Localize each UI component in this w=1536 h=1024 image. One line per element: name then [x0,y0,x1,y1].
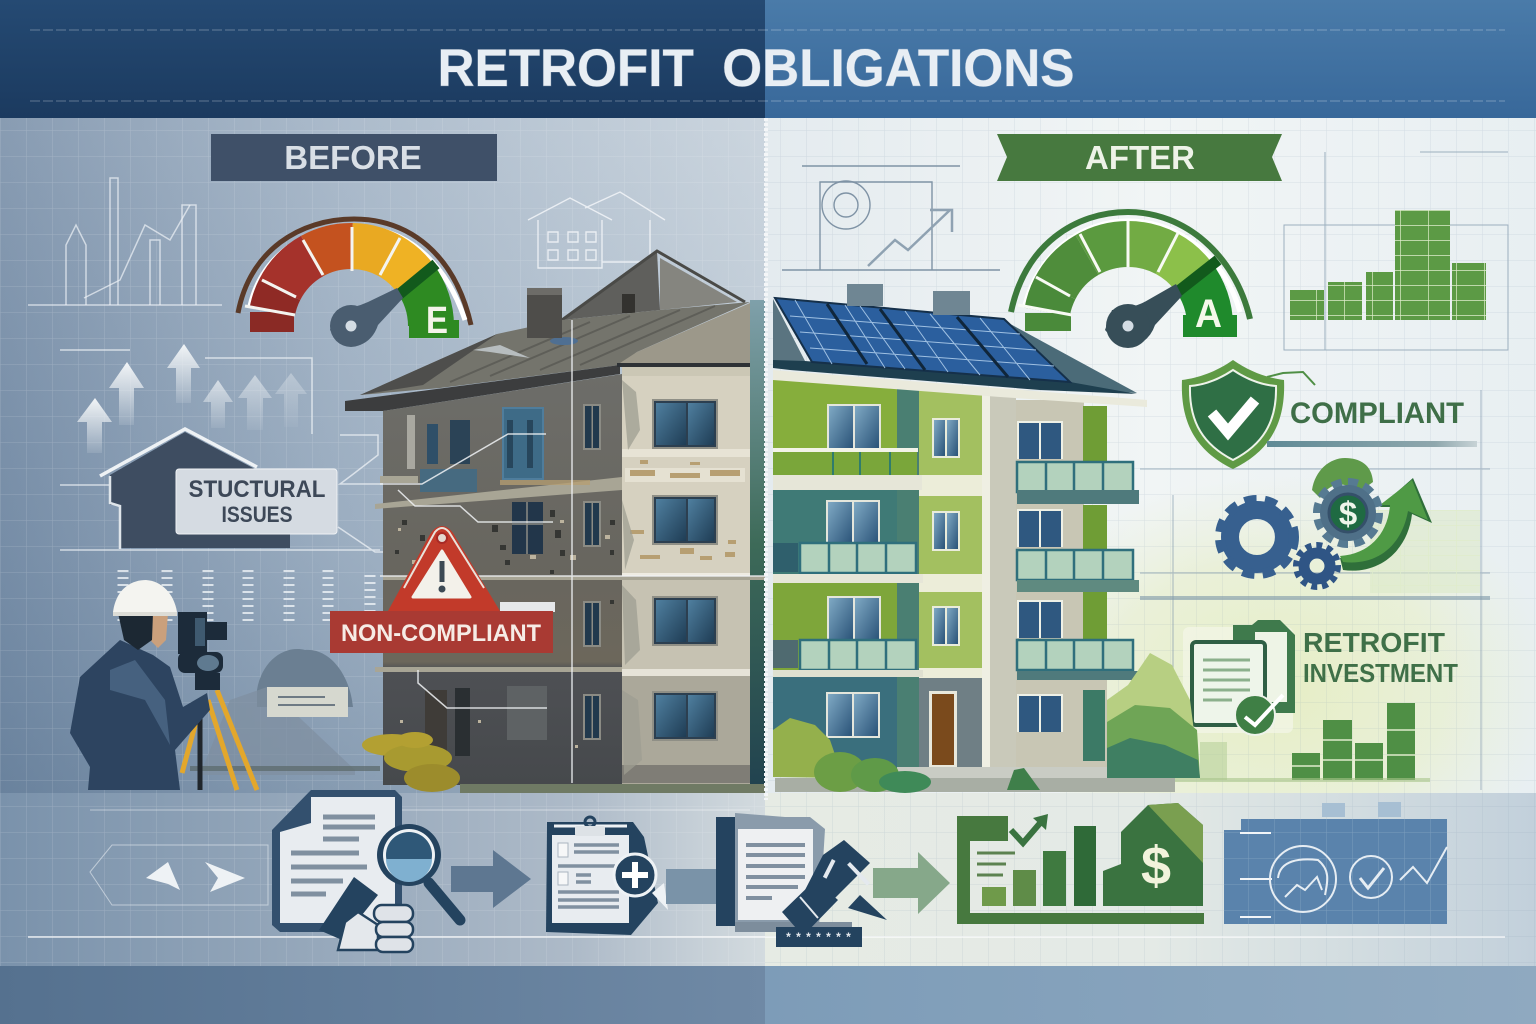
icon: up arrows [77,344,307,453]
blueprint lines right column [1140,390,1490,790]
new walls [773,380,1107,777]
arrow 1 [451,850,531,908]
grass line [1130,778,1430,782]
title: RETROFIT OBLIGATIONS [438,39,1074,98]
surveyor figure [70,580,257,790]
lower strip background [0,793,1536,967]
old windows [407,399,718,756]
before label [211,134,497,181]
icon: document with magnifier and coins [272,790,460,952]
label: retrofit investment: INVESTMENT [1303,658,1458,688]
rating letter: A [1195,292,1222,336]
camera [178,612,227,690]
footer band [0,966,1536,1024]
callout: structural issues: STUCTURAL [188,476,326,503]
solar roof [773,298,1147,407]
new windows [826,404,1063,738]
icon: house [100,429,290,549]
icon: clipboard with plus [546,817,668,935]
shrubs: new side [773,653,1200,793]
callout: structural issues: ISSUES [222,502,292,527]
blueprint sketch: line chart top left [28,178,222,305]
arrow 3 [873,852,950,914]
panel: finance chart: $ [1141,836,1171,896]
energy gauge: E [238,219,471,347]
horizontal rule under gears [1140,596,1490,600]
icon: gears, dollar and arrow [1220,458,1432,587]
body [70,640,210,790]
entrance steps [897,767,1113,792]
blueprint sketch: map and rising trend [782,166,1000,270]
icon: compliance shield [1182,360,1315,469]
old walls [383,300,765,790]
gauge needle [1105,284,1182,348]
tick marks [123,570,370,622]
after label [997,134,1282,181]
panel: performance dashboard [1224,802,1447,924]
label: compliant: COMPLIANT [1290,397,1464,430]
pale grid bars behind arrow [1370,510,1480,593]
banner: non-compliant: NON-COMPLIANT [341,620,541,647]
blueprint bracket lines [60,350,400,552]
callout: structural issues [176,469,337,534]
balconies [773,448,1139,680]
entrance door [929,691,957,767]
arrow 2 band [666,869,717,904]
label: retrofit investment: RETROFIT [1303,627,1445,658]
new building [773,284,1147,792]
divider line [764,118,768,800]
plaster damage [395,380,745,775]
survey scene background [190,649,380,775]
shrubs: old side [362,732,460,792]
chimneys [847,284,970,315]
bar chart: green top right [1284,152,1508,350]
blueprint sketch: houses [528,192,665,268]
bar chart: investment [1200,703,1415,780]
icon: documents with check [1183,620,1295,735]
banner: non-compliant [330,611,553,653]
label: retrofit investment [1303,627,1458,688]
ground strip [460,778,1175,793]
blueprint leader lines [380,320,765,783]
old balcony [420,469,477,492]
process flow: chevrons [90,845,268,905]
icon: document and gavel: * * * * * * * [786,930,852,944]
tripod [182,690,257,790]
old wall bands [375,476,765,672]
after label: AFTER [1085,139,1195,176]
before label: BEFORE [284,139,422,176]
header band [0,0,1536,118]
gauge needle [330,288,403,347]
energy gauge: A [1011,212,1250,348]
label: compliant [1267,397,1477,447]
background: before side [0,118,765,968]
rating letter: E [426,300,448,342]
old building [345,251,765,790]
panel: finance chart [957,803,1204,924]
icon: document and gavel [716,813,887,947]
background: after side [765,118,1536,968]
warning triangle [388,526,555,612]
head [113,580,177,650]
icon: gears, dollar and arrow: $ [1339,495,1357,532]
old roof [345,251,750,411]
